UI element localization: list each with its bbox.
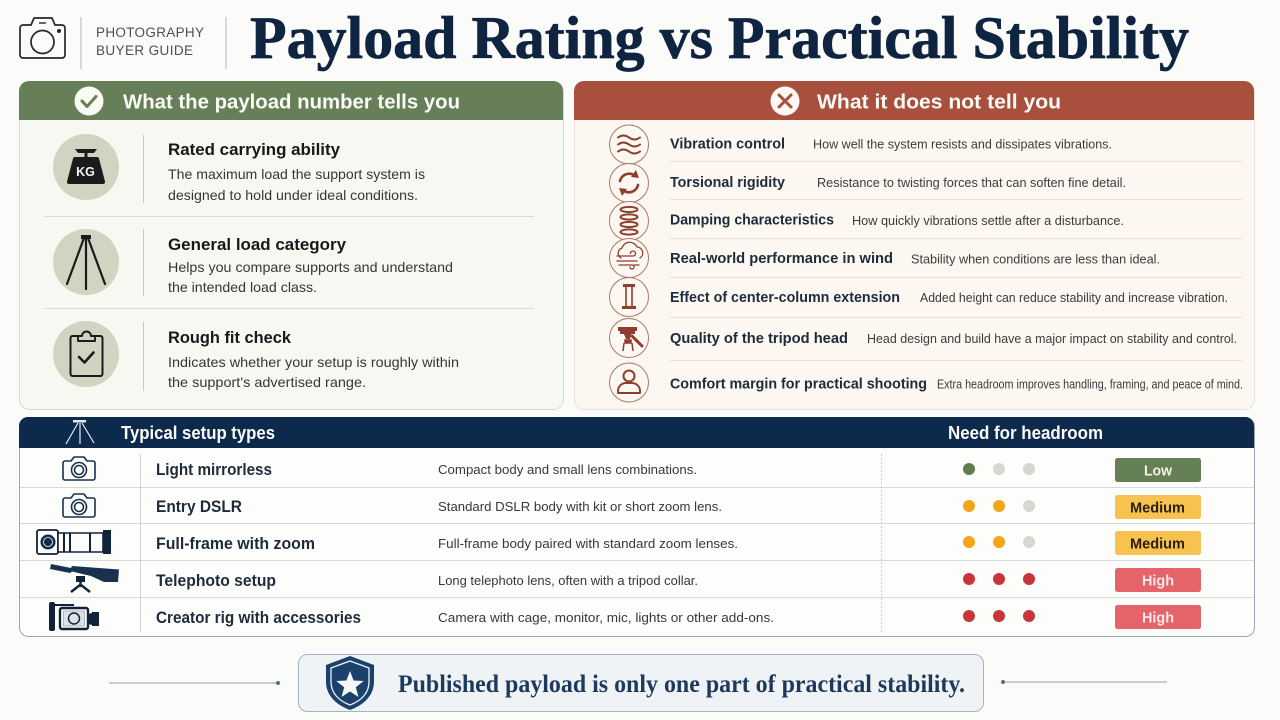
row: torsional rigidity — [610, 164, 1126, 202]
row: general load category: General load category — [168, 235, 347, 254]
row: effect of center-column extension — [610, 278, 1228, 316]
panel: what it does not tell you — [574, 81, 1254, 410]
table header — [19, 417, 1254, 448]
row: creator rig with accessories: High — [1142, 610, 1174, 626]
row: general load category: the intended load class. — [168, 279, 317, 295]
row: quality of the tripod head — [610, 318, 1237, 358]
callout: footer takeaway — [109, 654, 1167, 712]
row: telephoto setup: High — [1142, 572, 1174, 590]
row: real-world performance in wind: Stability when conditions are less than ideal. — [911, 252, 1160, 266]
row: quality of the tripod head: Head design and build have a major impact on stability and control. — [867, 331, 1237, 346]
row: quality of the tripod head: Quality of the tripod head — [670, 330, 848, 347]
row: creator rig with accessories — [49, 602, 1201, 631]
icon: camera — [20, 18, 65, 58]
row: comfort margin for practical shooting: Comfort margin for practical shooting — [670, 376, 927, 392]
row: light mirrorless: Low — [1144, 462, 1172, 480]
row: creator rig with accessories: Creator rig with accessories — [156, 608, 361, 627]
row: rated carrying ability — [53, 134, 425, 203]
row: entry DSLR: Entry DSLR — [156, 497, 242, 516]
row: effect of center-column extension: Effect of center-column extension — [670, 289, 900, 306]
row: general load category: Helps you compare supports and understand — [168, 259, 453, 275]
row: damping characteristics — [610, 202, 1124, 240]
row: full-frame with zoom: Full-frame with zoom — [156, 534, 315, 553]
row: full-frame with zoom: Full-frame body paired with standard zoom lenses. — [438, 536, 738, 551]
row: vibration control: How well the system resists and dissipates vibrations. — [813, 136, 1112, 152]
panel heading: tells you: What the payload number tells you — [123, 92, 460, 114]
row: vibration control: Vibration control — [670, 136, 785, 152]
row: effect of center-column extension: Added height can reduce stability and increase vibration. — [920, 290, 1228, 305]
row: rated carrying ability: Rated carrying ability — [168, 140, 341, 159]
row: rough fit check: Rough fit check — [168, 328, 292, 347]
callout: footer takeaway: Published payload is only one part of practical stability. — [398, 671, 965, 698]
row: telephoto setup: Long telephoto lens, often with a tripod collar. — [438, 573, 698, 588]
icon: shield with star — [326, 656, 374, 710]
table header: Need for headroom — [948, 423, 1103, 443]
row: light mirrorless — [63, 457, 1201, 482]
guide label: PHOTOGRAPHY — [96, 25, 204, 40]
title: Payload Rating vs Practical Stability — [250, 5, 1189, 71]
row: real-world performance in wind: Real-world performance in wind — [670, 250, 893, 267]
row: creator rig with accessories: Camera with cage, monitor, mic, lights or other add-ons. — [438, 610, 774, 625]
row: torsional rigidity: Torsional rigidity — [670, 174, 786, 191]
row: torsional rigidity: Resistance to twisting forces that can soften fine detail. — [817, 175, 1126, 190]
guide label: BUYER GUIDE — [96, 43, 193, 58]
guide label — [96, 25, 204, 58]
row: damping characteristics: Damping characteristics — [670, 212, 834, 228]
panel heading: tells you — [19, 81, 563, 120]
row: rough fit check: Indicates whether your setup is roughly within — [168, 354, 459, 370]
table header: Typical setup types — [121, 423, 275, 443]
row: full-frame with zoom: Medium — [1130, 536, 1185, 552]
row: full-frame with zoom — [37, 530, 1201, 555]
row: damping characteristics: How quickly vibrations settle after a disturbance. — [852, 213, 1124, 228]
row: rough fit check — [53, 321, 459, 391]
panel: setup types table — [19, 417, 1254, 636]
row: entry DSLR: Medium — [1130, 500, 1185, 516]
row: light mirrorless: Compact body and small lens combinations. — [438, 462, 697, 477]
row: light mirrorless: Light mirrorless — [156, 460, 272, 479]
row: telephoto setup — [50, 564, 1201, 592]
row: real-world performance in wind — [610, 238, 1160, 278]
panel: what the payload number tells you — [19, 81, 564, 410]
row: rated carrying ability: KG — [76, 165, 95, 179]
row: entry DSLR: Standard DSLR body with kit or short zoom lens. — [438, 499, 722, 514]
row: entry DSLR — [63, 494, 1201, 519]
row: general load category — [53, 229, 453, 296]
row: rated carrying ability: designed to hold under ideal conditions. — [168, 187, 418, 203]
row: telephoto setup: Telephoto setup — [156, 571, 276, 590]
panel heading: does not tell you: What it does not tell you — [817, 92, 1061, 114]
row: vibration control — [610, 125, 1112, 164]
row: rated carrying ability: The maximum load the support system is — [168, 166, 425, 182]
panel heading: does not tell you — [574, 81, 1254, 120]
row: comfort margin for practical shooting — [610, 363, 1243, 402]
header — [20, 5, 1189, 71]
row: rough fit check: the support's advertised range. — [168, 374, 366, 390]
